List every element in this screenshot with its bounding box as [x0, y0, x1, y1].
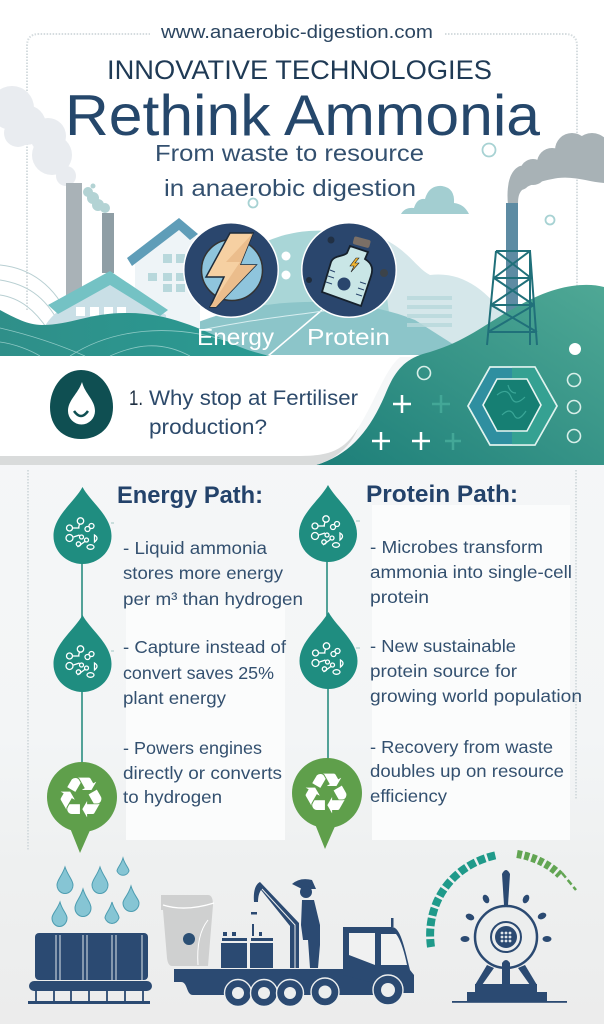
energy path timeline — [47, 487, 117, 853]
back house — [127, 218, 200, 340]
left chimneys — [66, 183, 114, 298]
drop icon 2 — [54, 615, 112, 692]
drop icon 1 — [54, 487, 112, 564]
small teal smoke — [83, 184, 110, 213]
right smoke — [508, 133, 604, 205]
protein path column: protein source for — [370, 661, 517, 681]
protein path column: ammonia into single-cell — [370, 562, 572, 582]
section heading: production? — [149, 416, 267, 439]
right dots column — [418, 343, 581, 442]
section heading: 1. — [129, 387, 143, 410]
protein path column: protein — [370, 587, 429, 607]
energy path column: - Powers engines — [123, 738, 262, 758]
section heading: Why stop at Fertiliser — [149, 387, 358, 410]
worker — [292, 879, 320, 968]
kicker heading: INNOVATIVE TECHNOLOGIES — [107, 55, 492, 85]
storage tank — [28, 933, 152, 1004]
white dots between circles — [282, 252, 290, 280]
drop icon 2 — [300, 612, 358, 689]
hexagon icon — [468, 367, 557, 445]
protein path column: efficiency — [370, 786, 447, 806]
grey bin — [161, 895, 213, 966]
dotted window pattern — [407, 296, 452, 327]
subtitle: From waste to resource — [155, 140, 424, 166]
right teal hill and section panel bg — [316, 285, 604, 465]
energy circle icon — [183, 222, 279, 318]
protein path column: - Recovery from waste — [370, 737, 553, 757]
curved lines — [0, 265, 70, 330]
website url: www.anaerobic-digestion.com — [160, 21, 433, 42]
teal wave foreground — [0, 310, 270, 356]
recycle pin — [292, 758, 362, 849]
protein path timeline — [292, 485, 362, 849]
energy path column: per m³ than hydrogen — [123, 589, 303, 609]
dotted frame — [27, 34, 577, 850]
subtitle — [155, 140, 424, 201]
title: Rethink Ammonia — [65, 84, 540, 148]
text backing panel right — [372, 505, 570, 840]
drop icon 1 — [299, 485, 357, 562]
band shadow — [0, 428, 358, 465]
truck — [161, 879, 414, 1006]
protein path column: doubles up on resource — [370, 761, 564, 781]
protein path column: - New sustainable — [370, 636, 516, 656]
turbine gauge arc — [430, 854, 576, 947]
protein label: Protein — [307, 324, 390, 350]
energy path column: directly or converts — [123, 763, 282, 783]
energy label: Energy — [197, 324, 275, 350]
recycle pin — [47, 762, 117, 853]
turbine — [452, 870, 567, 1003]
section heading — [129, 387, 358, 439]
scenery: pale hills — [180, 230, 530, 356]
energy path column: plant energy — [123, 688, 226, 708]
white section band — [0, 357, 400, 456]
right stack — [506, 203, 518, 353]
water droplets — [52, 858, 139, 926]
boxes — [221, 943, 247, 968]
energy path column: to hydrogen — [123, 787, 222, 807]
recycle pin: ♻ — [56, 766, 106, 831]
subtitle: in anaerobic digestion — [164, 175, 416, 201]
wheels — [224, 975, 403, 1006]
cab — [343, 927, 414, 993]
protein path column — [366, 481, 582, 806]
text backing panel left — [126, 600, 285, 840]
energy path column: - Capture instead of — [123, 637, 286, 657]
protein path column: growing world population — [370, 686, 582, 706]
bed — [174, 969, 385, 995]
plus signs — [372, 395, 461, 450]
energy path column: convert saves 25% — [123, 663, 274, 683]
front house — [38, 271, 168, 345]
energy path column: - Liquid ammonia — [123, 538, 267, 558]
energy path column — [117, 482, 303, 807]
protein path column: Protein Path: — [366, 481, 518, 508]
energy path column: stores more energy — [123, 563, 283, 583]
transmission tower — [487, 251, 537, 345]
recycle pin: ♻ — [301, 762, 351, 827]
header background — [0, 0, 604, 357]
floating circles — [248, 144, 554, 224]
teal cloud — [401, 186, 469, 214]
section icon: droplet badge — [50, 370, 113, 439]
crane arm — [254, 882, 299, 968]
protein path column: - Microbes transform — [370, 537, 543, 557]
energy path column: Energy Path: — [117, 482, 263, 509]
left smoke — [0, 86, 76, 186]
protein circle icon — [301, 222, 397, 318]
